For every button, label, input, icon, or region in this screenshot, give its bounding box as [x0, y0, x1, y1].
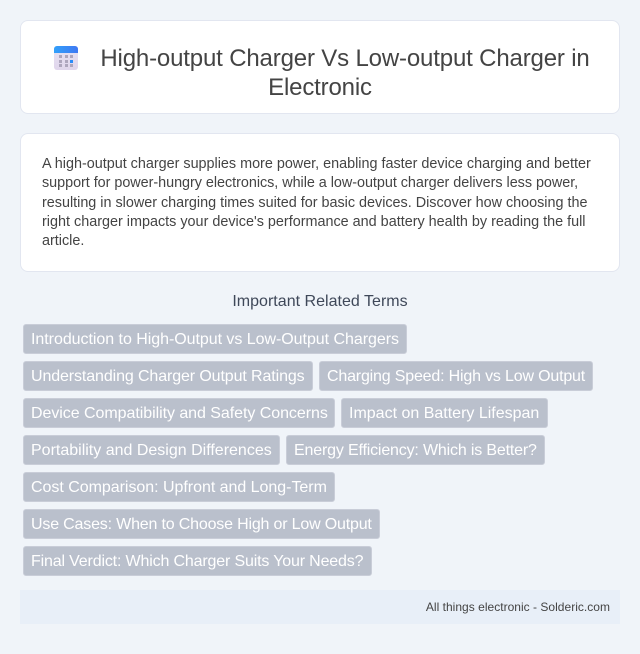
- chip: portability: [23, 435, 280, 465]
- footer: [20, 590, 620, 624]
- icon: calendar: [54, 46, 78, 70]
- text block: summary: [42, 156, 591, 249]
- chip: use cases: Use Cases: When to Choose High or Low Output: [31, 516, 372, 533]
- panel: summary: [20, 133, 620, 272]
- chip: battery lifespan: [341, 398, 548, 428]
- text block: summary: support for power-hungry electronics, while a low-output charger delivers less power,: [42, 175, 578, 191]
- chip: output ratings: Understanding Charger Output Ratings: [31, 368, 305, 385]
- chip: charging speed: Charging Speed: High vs Low Output: [327, 368, 585, 385]
- chip: introduction: [23, 324, 407, 354]
- text block: summary: resulting in slower charging times suited for basic devices. Discover how choosing the: [42, 195, 587, 211]
- title: [100, 45, 590, 101]
- chip: compatibility: Device Compatibility and Safety Concerns: [31, 405, 328, 422]
- heading: related terms: Important Related Terms: [232, 293, 408, 310]
- text block: summary: right charger impacts your device's performance and battery health by reading the full: [42, 214, 586, 230]
- chip: introduction: Introduction to High-Output vs Low-Output Chargers: [31, 331, 399, 348]
- text block: summary: article.: [42, 233, 84, 249]
- text block: summary: A high-output charger supplies more power, enabling faster device charging and better: [42, 156, 591, 172]
- panel: title card: [20, 20, 620, 114]
- chip: use cases: [23, 509, 380, 539]
- chip: portability: Portability and Design Differences: [31, 442, 272, 459]
- footer text: All things electronic - Solderic.com: [426, 600, 610, 614]
- chip: final verdict: [23, 546, 372, 576]
- chip: final verdict: Final Verdict: Which Charger Suits Your Needs?: [31, 553, 363, 570]
- title: Electronic: [268, 74, 372, 101]
- chip: energy efficiency: [286, 435, 545, 465]
- title: High-output Charger Vs Low-output Charger in: [100, 45, 590, 72]
- chip: compatibility: [23, 398, 335, 428]
- chip: energy efficiency: Energy Efficiency: Which is Better?: [294, 442, 537, 459]
- chip: cost: [23, 472, 335, 502]
- chip: output ratings: [23, 361, 313, 391]
- chip: cost: Cost Comparison: Upfront and Long-Term: [31, 479, 327, 496]
- chip: battery lifespan: Impact on Battery Lifespan: [349, 405, 539, 422]
- chip: charging speed: [319, 361, 593, 391]
